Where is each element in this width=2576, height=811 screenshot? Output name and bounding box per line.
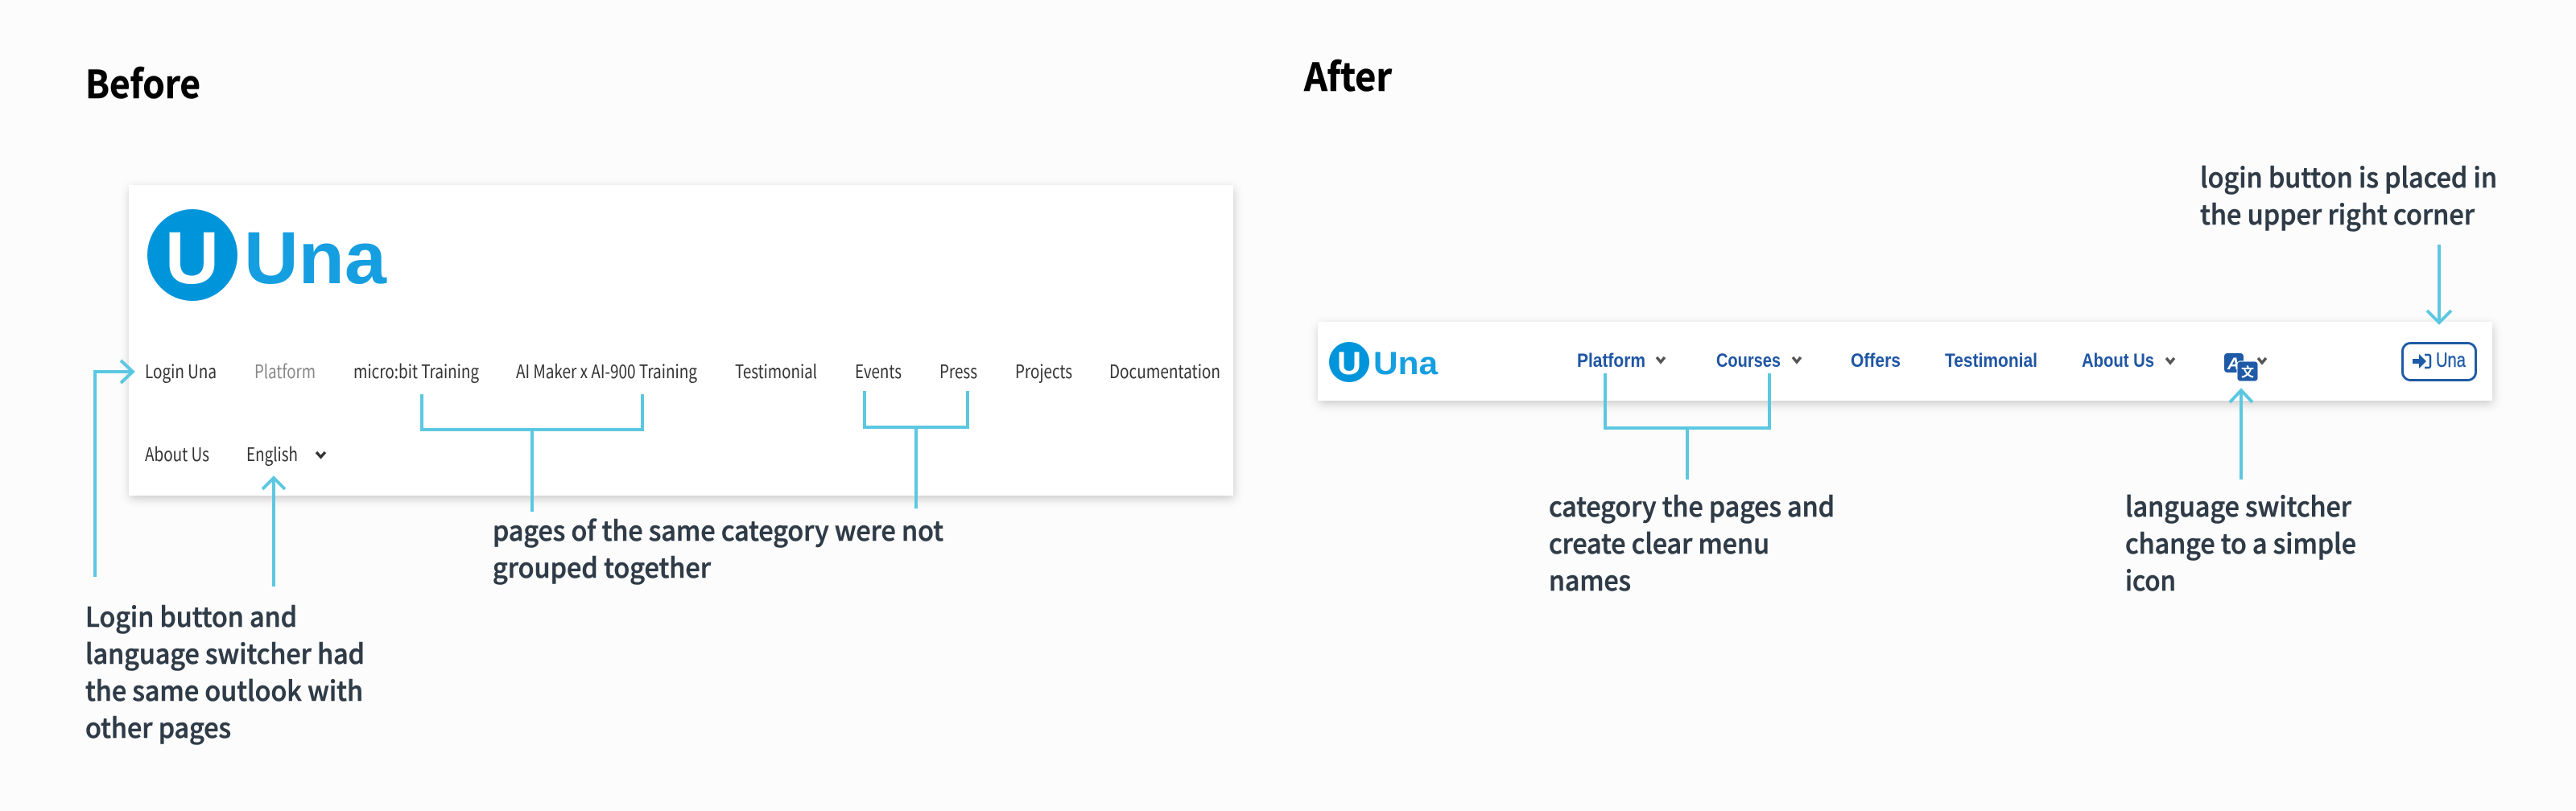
text: category note: create clear menu [1549, 522, 1769, 562]
menu: before navigation items: Login Una [145, 356, 217, 384]
arrow: login callout [95, 360, 133, 577]
menu: after navigation items: Courses [1716, 350, 1781, 372]
menu: before navigation items [145, 356, 1220, 467]
logo: Una small: Una [1373, 346, 1439, 381]
bracket: events and press [865, 391, 968, 508]
arrow: language icon callout [2230, 390, 2252, 480]
menu: before navigation items: Events [855, 356, 902, 384]
text: language switcher note: icon [2125, 559, 2176, 599]
logo: Una small: U [1337, 346, 1361, 381]
text: login and language note: Login button and [85, 595, 297, 635]
arrow: language callout (before) [262, 478, 285, 587]
menu: before navigation items: Testimonial [735, 356, 817, 384]
text: login and language note: the same outlook with [85, 669, 363, 709]
text: login placement note [2200, 156, 2497, 233]
text: login placement note: login button is placed in [2200, 156, 2497, 196]
menu: after navigation items [1577, 350, 2174, 372]
panel: before navigation [129, 185, 1233, 496]
menu: before navigation items: Documentation [1109, 356, 1220, 384]
icon: language switcher [2224, 353, 2266, 381]
logo: Una large [147, 209, 387, 301]
logo: Una large: Una [244, 217, 387, 299]
text: language switcher note: change to a simple [2125, 522, 2356, 562]
text: pages grouping note: pages of the same category were not [493, 509, 943, 549]
heading: After: After [1303, 46, 1392, 102]
menu: before navigation items: About Us [145, 439, 209, 467]
menu: before navigation items: Press [939, 356, 977, 384]
text: pages grouping note: grouped together [493, 546, 711, 586]
bracket: platform and courses [1605, 373, 1769, 480]
heading: Before: Before [85, 53, 200, 109]
text: login and language note: other pages [85, 706, 231, 746]
menu: after navigation items: Platform [1577, 350, 1645, 372]
menu: before navigation items: Projects [1015, 356, 1072, 384]
menu: after navigation items: About Us [2082, 350, 2154, 372]
menu: after navigation items: Testimonial [1945, 350, 2037, 372]
bracket: training pages [422, 394, 642, 512]
menu: after navigation items: Offers [1851, 350, 1901, 372]
menu: before navigation items: Platform [254, 356, 316, 384]
text: category note: category the pages and [1549, 485, 1835, 525]
panel: after navigation [1318, 322, 2492, 401]
icon: language switcher: A [2227, 355, 2240, 373]
menu: before navigation items: AI Maker x AI-900 Training [516, 356, 697, 384]
text: language switcher note [2125, 485, 2356, 599]
text: language switcher note: language switcher [2125, 485, 2351, 525]
text: pages grouping note [493, 509, 943, 586]
logo: Una large: U [165, 217, 219, 299]
text: login and language note [85, 595, 365, 746]
button: login Una: Una [2436, 349, 2466, 372]
text: login and language note: language switcher had [85, 632, 365, 672]
arrow: login button callout [2427, 245, 2451, 323]
text: login placement note: the upper right corner [2200, 193, 2475, 233]
menu: before navigation items: micro:bit Training [353, 356, 479, 384]
menu: before navigation items: English [246, 439, 298, 467]
text: category note: names [1549, 559, 1631, 599]
button: login Una [2402, 343, 2476, 380]
text: category note [1549, 485, 1835, 599]
icon: language switcher: 文 [2241, 361, 2254, 381]
logo: Una small [1329, 342, 1439, 382]
